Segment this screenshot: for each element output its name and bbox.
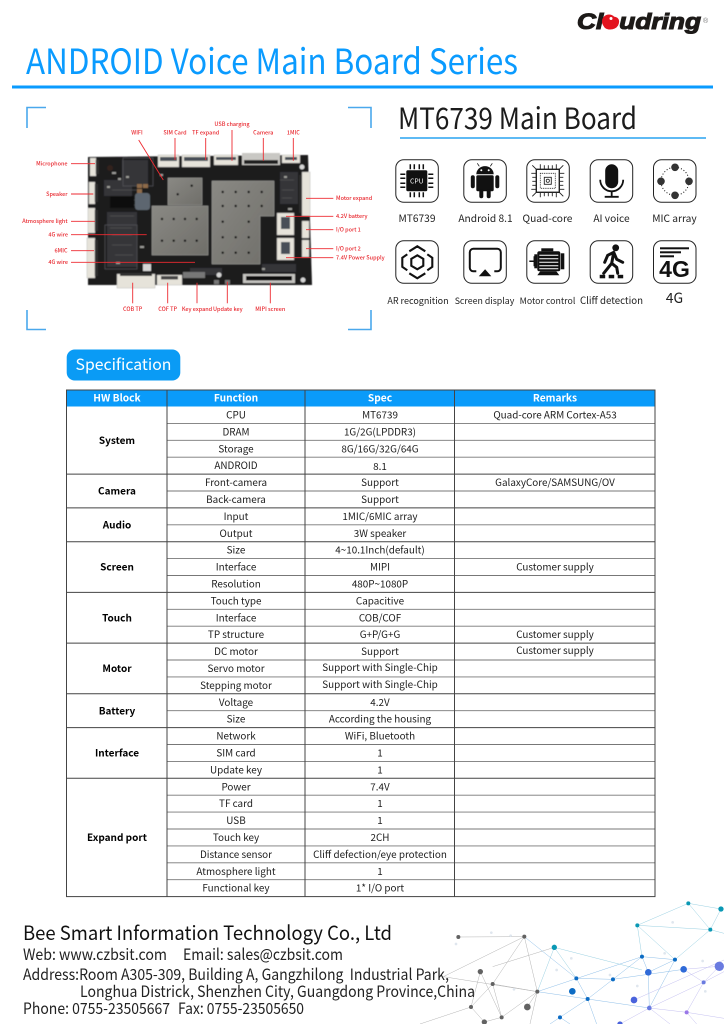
table header row: Spec: [368, 390, 393, 405]
table block: Interface: WiFi, Bluetooth: [345, 729, 415, 743]
table block: Touch: Touch: [102, 609, 132, 624]
table block: Battery: [99, 695, 432, 726]
table block: Interface: 1: [377, 746, 383, 760]
callout labels: Microphone: [36, 160, 68, 168]
table block: Motor: DC motor: [214, 644, 258, 658]
table block: Screen: Customer supply: [516, 560, 594, 574]
corner brackets: [27, 108, 371, 330]
callout labels: 4.2V battery: [336, 212, 367, 220]
table block: Touch: G+P/G+G: [360, 627, 400, 641]
web and email: Web: www.czbsit.com: [23, 943, 167, 965]
table block: Screen: MIPI: [370, 560, 390, 574]
table block: Touch: Customer supply: [516, 627, 594, 641]
table block: System: 8G/16G/32G/64G: [341, 441, 419, 455]
table block: Motor: Support: [361, 644, 399, 658]
table header row: Function: [214, 390, 258, 405]
callout labels: MIPI screen: [255, 305, 285, 313]
icon labels: [387, 210, 697, 308]
callout labels: Motor expand: [336, 194, 372, 202]
table header row: HW Block: [93, 390, 142, 405]
table block: Touch: COB/COF: [359, 610, 402, 624]
table block: Expand port: Atmosphere light: [196, 864, 276, 878]
callout labels: COF TP: [158, 305, 178, 313]
phone and fax: Phone: 0755-23505667: [23, 997, 170, 1019]
icon: Android: [464, 160, 506, 202]
table block: Expand port: Expand port: [87, 829, 148, 844]
callout labels: I/O port 2: [336, 245, 361, 253]
table block: Expand port: USB: [226, 813, 246, 827]
web and email: [23, 943, 343, 965]
logo: Cloudring: Cloudring: [577, 9, 702, 34]
table block: Battery: According the housing: [329, 712, 432, 726]
callout labels: Speaker: [46, 190, 68, 198]
callout labels: Camera: [253, 128, 273, 136]
icon labels: Cliff detection: [580, 293, 643, 307]
callout labels: I/O port 1: [336, 226, 361, 234]
table block: Camera: GalaxyCore/SAMSUNG/OV: [495, 475, 615, 489]
icon labels: Motor control: [520, 294, 576, 307]
callout labels: TF expand: [192, 128, 219, 136]
table block: System: CPU: [226, 408, 246, 422]
table block: Audio: Output: [220, 526, 253, 540]
table block: Motor: Support with Single-Chip: [322, 660, 438, 674]
address: [23, 963, 475, 1002]
callout labels: [22, 120, 385, 313]
heading: Specification pill: [67, 350, 180, 380]
table block: Screen: [100, 543, 594, 590]
table block: Expand port: 1: [377, 813, 383, 827]
table block: Screen: Size: [227, 543, 246, 557]
table block: Motor: [102, 643, 594, 692]
icon labels: MIC array: [652, 210, 697, 225]
table block: Camera: [98, 475, 615, 506]
table header row: [66, 390, 655, 406]
table block: Touch: Capacitive: [356, 593, 405, 607]
table block: Camera: Camera: [98, 482, 136, 498]
table block: System: Quad-core ARM Cortex-A53: [493, 408, 617, 422]
table block: System: 1G/2G(LPDDR3): [344, 424, 416, 438]
table block: Motor: Servo motor: [207, 661, 265, 675]
table block: Expand port: Touch key: [213, 830, 259, 844]
table block: Expand port: Distance sensor: [200, 847, 272, 861]
icon: Cliff detection walker: [590, 241, 633, 283]
table block: Touch: TP structure: [208, 627, 265, 641]
table block: Camera: Back-camera: [206, 492, 266, 506]
table block: Touch: Interface: [216, 610, 257, 624]
phone and fax: [23, 997, 304, 1019]
table: specification: [66, 390, 655, 897]
table block: Screen: Screen: [100, 559, 134, 574]
table block: Interface: Network: [216, 729, 256, 743]
icon labels: Quad-core: [523, 210, 573, 225]
table block: Touch: Touch type: [211, 593, 262, 607]
callout lines: [71, 130, 333, 303]
heading: MT6739 Main Board: MT6739 Main Board: [398, 96, 637, 138]
callout labels: SIM Card: [163, 128, 187, 136]
table block: Camera: Support: [361, 475, 399, 489]
icon labels: MT6739: [398, 210, 436, 225]
table block: Motor: Customer supply: [516, 643, 594, 657]
icon: AR recognition: [396, 241, 438, 283]
table block: Audio: Input: [224, 509, 249, 523]
web and email: Email: sales@czbsit.com: [183, 943, 343, 965]
table block: Battery: Size: [227, 712, 246, 726]
table block: Touch: [102, 593, 594, 641]
icon: Quad-core chip: [527, 160, 569, 202]
callout labels: 4G wire: [48, 258, 68, 266]
icon labels: Android 8.1: [458, 210, 513, 225]
icon: Screen display: [464, 241, 506, 283]
icon: CPU: [396, 160, 438, 202]
title: ANDROID Voice Main Board Series: [26, 34, 518, 85]
table block: Expand port: 1: [377, 796, 383, 810]
footer contact block: [23, 917, 475, 1019]
icon labels: AI voice: [593, 210, 630, 225]
icon: MIC array: [654, 160, 696, 202]
icon: CPU: CPU: [410, 176, 424, 186]
connectors: [87, 155, 310, 288]
callout labels: Key expand: [182, 305, 212, 313]
table block: System: ANDROID: [214, 458, 258, 472]
table block: Screen: 480P~1080P: [352, 576, 408, 590]
table block: Camera: Front-camera: [205, 475, 267, 489]
table block: Interface: Update key: [210, 762, 262, 776]
table block: Expand port: Functional key: [202, 881, 270, 895]
table block: Expand port: TF card: [219, 796, 253, 810]
table block: Interface: 1: [377, 762, 383, 776]
icon: 4G: 4G: [659, 256, 690, 282]
table block: System: MT6739: [362, 408, 398, 422]
table block: Motor: Support with Single-Chip: [322, 677, 438, 691]
table block: Audio: 3W speaker: [354, 526, 406, 540]
address: Longhua Districk, Shenzhen City, Guangdong Province,China: [80, 980, 475, 1002]
panel: feature icons: [387, 160, 697, 308]
table block: Expand port: Cliff defection/eye protection: [313, 847, 447, 861]
table block: Battery: Battery: [99, 702, 136, 717]
table block: System: System: [99, 432, 135, 447]
panel: board photo with callouts: [22, 108, 385, 330]
table block: Interface: [95, 729, 415, 776]
address: Address:Room A305-309, Building A, Gangzhilong Industrial Park,: [23, 963, 449, 985]
board photo: [87, 153, 312, 288]
icon: 4G: [654, 241, 696, 283]
table block: System: DRAM: [222, 424, 250, 438]
table block: Expand port: 1: [377, 864, 383, 878]
table block: Screen: Resolution: [211, 576, 261, 590]
shields: [152, 178, 274, 264]
callout labels: WIFI: [131, 128, 143, 136]
icon labels: Screen display: [455, 294, 515, 307]
table block: Expand port: [87, 779, 447, 895]
table block: Motor: Stepping motor: [200, 678, 272, 692]
table block: Expand port: 1* I/O port: [356, 881, 404, 895]
callout labels: Atmosphere light: [22, 217, 68, 225]
callout labels: USB charging: [214, 120, 250, 128]
table block: Audio: Audio: [102, 516, 131, 531]
callout labels: COB TP: [123, 305, 143, 313]
heading: Specification pill: Specification: [76, 352, 171, 375]
network graphic: [420, 901, 724, 1024]
table block: Interface: SIM card: [216, 746, 256, 760]
table block: System: [99, 408, 617, 473]
callout labels: 1MIC: [287, 128, 300, 136]
logo: Cloudring: ®: [703, 17, 709, 25]
icon: AI voice microphone: [590, 160, 633, 202]
company name: Bee Smart Information Technology Co., Ltd: [23, 917, 392, 946]
table block: Screen: 4~10.1Inch(default): [335, 543, 425, 557]
callout labels: 4G wire: [48, 231, 68, 239]
table block: Motor: Motor: [102, 660, 132, 675]
phone and fax: Fax: 0755-23505650: [178, 997, 304, 1019]
table block: Expand port: 7.4V: [370, 779, 390, 793]
callout labels: 6MIC: [55, 247, 68, 255]
table block: Audio: [102, 509, 418, 540]
icon labels: AR recognition: [387, 294, 449, 307]
callout labels: Update key: [213, 305, 243, 313]
table block: System: Storage: [218, 441, 254, 455]
table block: Camera: Support: [361, 492, 399, 506]
table block: Screen: Interface: [216, 560, 257, 574]
table block: Interface: Interface: [95, 744, 139, 760]
icon labels: 4G: [666, 288, 683, 308]
table block: Battery: Voltage: [219, 695, 254, 709]
callout labels: 7.4V Power Supply: [336, 254, 385, 262]
table block: Battery: 4.2V: [370, 695, 390, 709]
table block: System: 8.1: [373, 459, 387, 473]
table header row: Remarks: [533, 390, 577, 405]
table block: Expand port: 2CH: [371, 830, 389, 844]
table block: Expand port: Power: [221, 779, 251, 793]
table block: Audio: 1MIC/6MIC array: [342, 509, 418, 523]
icon: Motor control: [527, 241, 569, 283]
